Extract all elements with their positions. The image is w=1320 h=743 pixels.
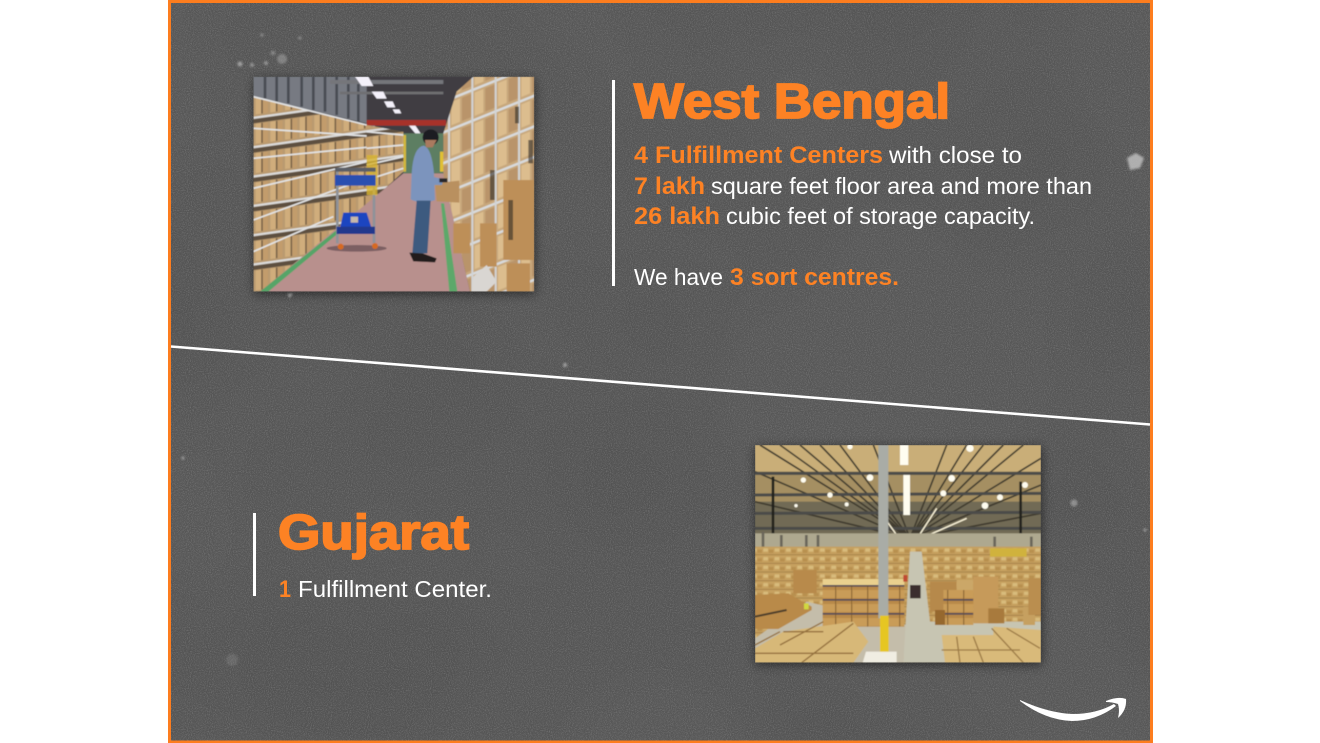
- text block: West Bengal facts: 4 Fulfillment Centers: [634, 142, 883, 169]
- worker: [409, 129, 459, 262]
- photo: large warehouse interior: [755, 444, 1042, 665]
- heading: Gujarat: Gujarat: [278, 506, 469, 560]
- text block: West Bengal facts: 7 lakh: [634, 173, 705, 200]
- text block: West Bengal facts: We have: [634, 264, 723, 290]
- text block: West Bengal facts: 26 lakh: [634, 203, 720, 230]
- heading: West Bengal: West Bengal: [634, 75, 950, 129]
- text block: West Bengal facts: [634, 142, 1092, 291]
- panel: Gujarat: [253, 444, 1042, 665]
- text block: West Bengal facts: with close to: [888, 142, 1022, 168]
- divider line: [171, 346, 1150, 424]
- vertical accent bar: [253, 513, 256, 596]
- vertical accent bar: [612, 80, 615, 286]
- panel: West Bengal: [253, 75, 1092, 294]
- panel: concrete background with orange border: [168, 0, 1153, 743]
- text block: Gujarat facts: 1: [279, 576, 291, 603]
- text block: West Bengal facts: 3 sort centres.: [730, 264, 899, 291]
- text block: West Bengal facts: square feet floor area and more than: [711, 173, 1092, 199]
- text block: Gujarat facts: Fulfillment Center.: [298, 576, 492, 602]
- icon: Amazon smile arrow: [1020, 698, 1126, 721]
- cart: [327, 155, 387, 252]
- photo: warehouse aisle with worker: [253, 77, 535, 294]
- text block: West Bengal facts: cubic feet of storage capacity.: [726, 203, 1035, 229]
